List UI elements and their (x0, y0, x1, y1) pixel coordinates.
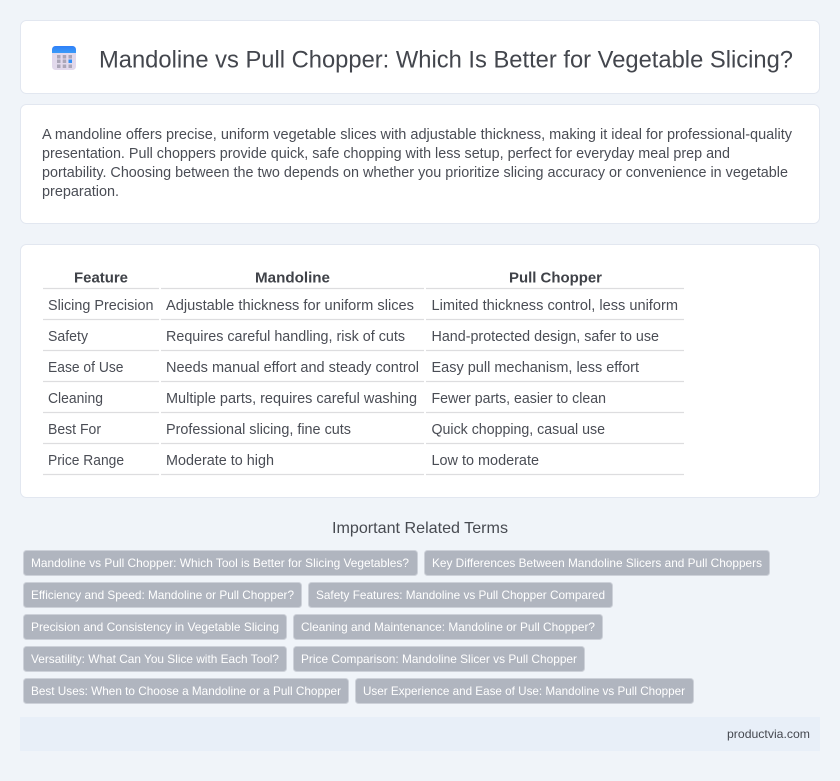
intro text: portability. Choosing between the two depends on whether you prioritize slicing accuracy or convenience in vegetable (42, 165, 788, 181)
row: ease of use: Ease of Use (48, 360, 124, 376)
tag 9 (24, 678, 348, 704)
row: price range: Low to moderate (432, 453, 539, 469)
tag 7 (24, 646, 286, 672)
table header: Pull Chopper (509, 270, 602, 286)
tag 7: Versatility: What Can You Slice with Each Tool? (31, 652, 279, 666)
row: ease of use: Needs manual effort and steady control (166, 360, 419, 376)
tag 3 (24, 582, 302, 608)
heading: important related terms: Important Related Terms (332, 520, 508, 537)
tag 2 (424, 550, 770, 576)
table header (74, 270, 602, 286)
row: slicing precision (48, 298, 678, 314)
tag 10 (356, 678, 694, 704)
table rule lines (43, 288, 684, 474)
table header: Feature (74, 270, 128, 286)
row: price range (48, 453, 539, 469)
row: safety: Hand-protected design, safer to use (432, 329, 659, 345)
row: best for: Professional slicing, fine cuts (166, 422, 351, 438)
row: best for (48, 422, 605, 438)
row: slicing precision: Limited thickness control, less uniform (432, 298, 678, 314)
tag 3: Efficiency and Speed: Mandoline or Pull Chopper? (31, 588, 294, 602)
tag 8: Price Comparison: Mandoline Slicer vs Pull Chopper (301, 652, 577, 666)
tag 5 (24, 614, 286, 640)
row: cleaning: Multiple parts, requires careful washing (166, 391, 417, 407)
tag 9: Best Uses: When to Choose a Mandoline or a Pull Chopper (31, 684, 341, 698)
tag 8 (294, 646, 584, 672)
row: ease of use: Easy pull mechanism, less effort (432, 360, 639, 376)
tag 4 (308, 582, 612, 608)
footer source: productvia.com (727, 727, 810, 741)
intro text: preparation. (42, 184, 119, 200)
row: safety (48, 329, 659, 345)
row: price range: Moderate to high (166, 453, 274, 469)
tag 1: Mandoline vs Pull Chopper: Which Tool is Better for Slicing Vegetables? (31, 556, 409, 570)
row: safety: Safety (48, 329, 89, 345)
tag 5: Precision and Consistency in Vegetable Slicing (31, 620, 279, 634)
related term tags (24, 550, 770, 704)
tag 4: Safety Features: Mandoline vs Pull Chopper Compared (316, 588, 605, 602)
row: slicing precision: Adjustable thickness for uniform slices (166, 298, 414, 314)
panel: introduction (20, 104, 820, 224)
tag 6: Cleaning and Maintenance: Mandoline or Pull Chopper? (301, 620, 595, 634)
row: cleaning (48, 391, 606, 407)
tag 1 (24, 550, 418, 576)
row: best for: Best For (48, 422, 101, 438)
intro text (42, 127, 793, 200)
row: slicing precision: Slicing Precision (48, 298, 154, 314)
icon: calendar (52, 46, 76, 70)
tag 2: Key Differences Between Mandoline Slicers and Pull Choppers (432, 556, 762, 570)
row: ease of use (48, 360, 639, 376)
row: safety: Requires careful handling, risk of cuts (166, 329, 405, 345)
table header: Mandoline (255, 270, 330, 286)
title: Mandoline vs Pull Chopper: Which Is Better for Vegetable Slicing? (99, 46, 793, 74)
tag 6 (294, 614, 602, 640)
footer (20, 717, 820, 751)
panel: comparison table (20, 244, 820, 498)
row: cleaning: Fewer parts, easier to clean (432, 391, 606, 407)
row: price range: Price Range (48, 453, 124, 469)
row: best for: Quick chopping, casual use (432, 422, 605, 438)
tag 10: User Experience and Ease of Use: Mandoline vs Pull Chopper (363, 684, 685, 698)
intro text: presentation. Pull choppers provide quick, safe chopping with less setup, perfect for everyday meal prep and (42, 146, 730, 162)
intro text: A mandoline offers precise, uniform vegetable slices with adjustable thickness, making it ideal for professional-quality (42, 127, 793, 143)
row: cleaning: Cleaning (48, 391, 103, 407)
panel: header (20, 20, 820, 94)
